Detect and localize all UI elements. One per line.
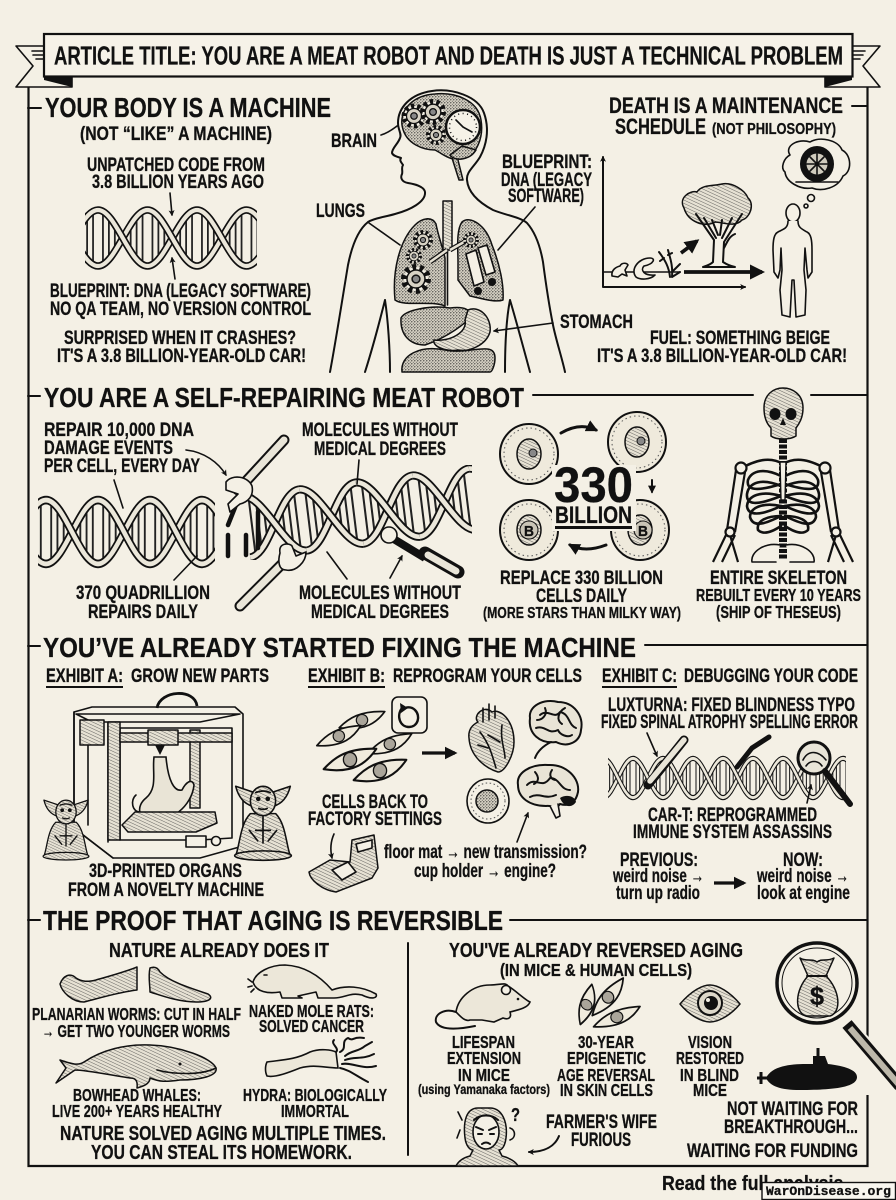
icon: round cell (467, 779, 509, 823)
text: bowhead: LIVE 200+ YEARS HEALTHY (52, 1101, 222, 1121)
exhibit c heading (602, 666, 858, 688)
subheading: you've already reversed aging (449, 940, 743, 980)
3d printer (74, 693, 243, 858)
text: unpatched code: UNPATCHED CODE FROM (87, 155, 265, 176)
printer frame (74, 707, 243, 858)
icon: epigenetic cells (567, 978, 641, 1028)
footer link: Read the full analysis → (662, 1173, 866, 1195)
text: molecules bottom: MOLECULES WITHOUT (299, 583, 461, 604)
heading: already started fixing: YOU’VE ALREADY STARTED FIXING THE MACHINE (43, 632, 636, 663)
text: surprised when it crashes: SURPRISED WHEN IT CRASHES? (64, 328, 296, 349)
money bag: $ (810, 981, 825, 1011)
text: previous (612, 850, 704, 904)
exhibit a heading (46, 666, 269, 688)
organ: intestines (402, 349, 495, 372)
evolution line (603, 271, 680, 273)
text: entire skeleton (696, 568, 861, 622)
text: vision restored: IN BLIND (680, 1065, 739, 1085)
text: now (756, 850, 850, 904)
heading: your body is a machine: YOUR BODY IS A MACHINE (45, 92, 331, 123)
arrow: to floor mat (331, 834, 334, 858)
text: epigenetic age reversal: EPIGENETIC (567, 1048, 646, 1068)
exhibit c heading: EXHIBIT C: (602, 666, 677, 687)
icon: lizard (634, 258, 655, 279)
text: surprised when it crashes: IT'S A 3.8 BILLION-YEAR-OLD CAR! (57, 346, 306, 367)
text: farmer's wife furious: FURIOUS (571, 1130, 631, 1151)
text: hydra (243, 1085, 387, 1121)
text: 370 quadrillion: 370 QUADRILLION (76, 583, 210, 604)
text: cells back to factory settings: FACTORY SETTINGS (308, 809, 442, 830)
icon: brain bottom (518, 765, 578, 818)
arrow: to brain (517, 813, 528, 842)
organ: stomach (434, 309, 490, 350)
text: mole rats (249, 1001, 374, 1036)
text: planarian (32, 1004, 241, 1041)
arrow: to dna from below (172, 258, 175, 279)
pelvis (752, 544, 814, 562)
icon: brain top (530, 701, 582, 758)
icon: frog (612, 263, 628, 277)
text: 3d printed organs: FROM A NOVELTY MACHINE (68, 880, 264, 901)
text: repair 10,000 (44, 420, 200, 477)
text: entire skeleton: (SHIP OF THESEUS) (716, 602, 841, 622)
text: cells back to factory settings (308, 792, 442, 830)
icon: planarian worm right half (149, 967, 211, 1002)
text: unpatched code: 3.8 BILLION YEARS AGO (92, 172, 264, 193)
icon: bowhead whale (56, 1045, 216, 1088)
text: vision restored: RESTORED (676, 1048, 744, 1068)
icon: submarine (757, 1048, 857, 1090)
cell bottom right: B (638, 523, 648, 540)
helix (573, 758, 873, 798)
text: previous: weird noise → (612, 866, 704, 887)
pencil (648, 740, 684, 785)
arrow: previous to now (714, 881, 744, 885)
text: previous: PREVIOUS: (620, 850, 698, 871)
text: repair 10,000: DAMAGE EVENTS (44, 438, 173, 459)
yoda left (43, 800, 89, 860)
text: molecules top: MOLECULES WITHOUT (302, 420, 458, 441)
text: 3d printed organs: 3D-PRINTED ORGANS (89, 861, 242, 882)
dna with tools (608, 734, 853, 807)
cell top left (500, 424, 558, 484)
labels (316, 131, 633, 333)
text: repair 10,000: PER CELL, EVERY DAY (44, 456, 200, 477)
text: nature solved aging (60, 1123, 386, 1164)
icon: farmer's wife (456, 1105, 520, 1166)
exhibit a heading: GROW NEW PARTS (131, 666, 269, 687)
printed stomach (140, 757, 194, 821)
text: bowhead (52, 1085, 222, 1121)
text: nature solved aging: YOU CAN STEAL ITS HOMEWORK. (91, 1142, 352, 1164)
broken dna pieces (228, 505, 258, 556)
arrow: to pencil (647, 733, 657, 756)
scalpel (737, 737, 769, 767)
text: lifespan extension: (using Yamanaka factors) (418, 1081, 550, 1097)
text: vision restored: VISION (688, 1032, 732, 1052)
text: hydra: IMMORTAL (281, 1101, 349, 1121)
arrows to dna (114, 450, 402, 580)
magnifier handle (847, 1024, 896, 1086)
subheading: you've already reversed aging: (IN MICE & HUMAN CELLS) (500, 960, 692, 980)
text: car-t: CAR-T: REPROGRAMMED (648, 805, 817, 826)
icon: dna helix (85, 206, 257, 270)
text: epigenetic age reversal: IN SKIN CELLS (560, 1080, 653, 1100)
wrench bottom (240, 544, 306, 606)
magnifier with money bag (777, 943, 896, 1086)
skull (764, 388, 803, 439)
icon: heart (469, 704, 514, 772)
arrows between cells (561, 427, 652, 549)
text: epigenetic age reversal (557, 1032, 655, 1100)
text: floor mat (384, 842, 587, 882)
section: proof that aging is reversible (28, 905, 896, 1166)
text: vision restored: MICE (693, 1080, 727, 1100)
exhibit a heading: EXHIBIT A: (46, 666, 123, 687)
text: floor mat: floor mat → new transmission? (384, 842, 587, 863)
text: floor mat: cup holder → engine? (414, 861, 556, 882)
text: fuel (597, 328, 847, 367)
arrow: thick diagonal (681, 241, 697, 253)
icon: sprout (659, 250, 680, 277)
text: blueprint dna: BLUEPRINT: DNA (LEGACY SOFTWARE) (50, 281, 311, 302)
section: death is a maintenance schedule (597, 93, 867, 367)
text: now: look at engine (757, 883, 850, 904)
heading: self-repairing meat robot: YOU ARE A SELF-REPAIRING MEAT ROBOT (44, 382, 524, 413)
dna helix right fragment (248, 465, 472, 560)
heading: death is a maintenance schedule: DEATH IS A MAINTENANCE (609, 93, 843, 118)
text: hydra: HYDRA: BIOLOGICALLY (243, 1085, 387, 1105)
heading: your body is a machine (28, 92, 331, 145)
filament tube (157, 693, 197, 708)
text: now: weird noise → (756, 866, 849, 887)
text: molecules top (302, 420, 458, 460)
text: lifespan extension: LIFESPAN (452, 1032, 515, 1052)
text: replace 330 billion: (MORE STARS THAN MILKY WAY) (483, 605, 681, 622)
text: nature solved aging: NATURE SOLVED AGING MULTIPLE TIMES. (60, 1123, 386, 1145)
wrench top (226, 440, 284, 512)
arrow: to magnifier (807, 785, 811, 803)
organ: trachea (443, 201, 452, 305)
text: planarian: → GET TWO YOUNGER WORMS (42, 1021, 230, 1041)
arrow: thick horizontal (684, 270, 762, 274)
heading: death is a maintenance schedule: SCHEDULE (615, 114, 706, 139)
subheading: you've already reversed aging: YOU'VE ALREADY REVERSED AGING (449, 940, 743, 962)
arrows to organs (369, 126, 553, 331)
title banner (16, 34, 880, 87)
text: replace 330 billion: REPLACE 330 BILLION (500, 568, 663, 589)
skeleton (713, 388, 853, 562)
text: mole rats: NAKED MOLE RATS: (249, 1001, 374, 1021)
number: 330 billion: 330 (554, 457, 633, 513)
text: 3d printed organs (68, 861, 264, 901)
text: not waiting: NOT WAITING FOR (727, 1099, 858, 1120)
organ: brain with gears and clock (402, 94, 482, 180)
arrow: to dna from above (170, 193, 172, 215)
text: car-t (633, 805, 832, 843)
spine (779, 439, 787, 560)
icon: eye (680, 985, 740, 1022)
yoda right (235, 786, 291, 860)
control panel (186, 836, 206, 847)
text: cells back to factory settings: CELLS BACK TO (322, 792, 428, 813)
text: now: NOW: (783, 850, 823, 871)
icon: reset button (392, 697, 427, 733)
divider (407, 943, 409, 1155)
chart axes (603, 157, 745, 287)
text: farmer's wife furious (546, 1112, 657, 1151)
text: bowhead: BOWHEAD WHALES: (73, 1085, 201, 1105)
text: molecules bottom (299, 583, 461, 623)
text: mole rats: SOLVED CANCER (259, 1016, 364, 1036)
labels: STOMACH (560, 312, 633, 333)
text: previous: turn up radio (616, 883, 700, 904)
text: 370 quadrillion: REPAIRS DAILY (88, 602, 198, 623)
text: unpatched code (87, 155, 265, 193)
exhibit b heading (308, 666, 582, 688)
exhibit b heading: EXHIBIT B: (308, 666, 385, 687)
text: molecules bottom: MEDICAL DEGREES (311, 602, 449, 623)
text: entire skeleton: ENTIRE SKELETON (710, 568, 847, 589)
labels: BLUEPRINT: (502, 152, 592, 173)
text: not waiting (687, 1099, 858, 1162)
cell top right (608, 412, 666, 472)
text: blueprint dna (50, 281, 311, 320)
text: lifespan extension (418, 1032, 550, 1097)
labels: LUNGS (316, 201, 365, 222)
icon: hydra (266, 1038, 376, 1082)
cell bottom left: B (524, 523, 534, 540)
labels: SOFTWARE) (508, 186, 584, 207)
text: lifespan extension: IN MICE (458, 1065, 510, 1085)
text: farmer's wife furious: FARMER'S WIFE (546, 1112, 657, 1133)
text: replace 330 billion (483, 568, 681, 622)
text: epigenetic age reversal: 30-YEAR (578, 1032, 634, 1052)
text: planarian: PLANARIAN WORMS: CUT IN HALF (32, 1004, 241, 1024)
icon: naked mole rat (248, 965, 376, 998)
text: epigenetic age reversal: AGE REVERSAL (557, 1065, 655, 1085)
organ: liver (401, 307, 470, 345)
magnifier (798, 742, 850, 804)
source badge: WarOnDisease.org (766, 1184, 891, 1199)
labels: DNA (LEGACY (501, 170, 592, 191)
icon: farmer's wife: ? (511, 1105, 520, 1125)
text: surprised when it crashes (57, 328, 306, 367)
icon: tree (682, 184, 751, 267)
text: lifespan extension: EXTENSION (447, 1048, 521, 1068)
icon: planarian worm left half (60, 967, 137, 1002)
ribcage (738, 460, 828, 533)
body anatomy illustration (316, 90, 633, 372)
body outline (330, 90, 565, 372)
text: 370 quadrillion (76, 583, 210, 623)
exhibit b heading: REPROGRAM YOUR CELLS (393, 666, 582, 687)
icon: human silhouette (773, 204, 812, 317)
icon: mouse (436, 984, 530, 1029)
section: your body is a machine (28, 92, 331, 367)
dna helix left fragment (38, 496, 215, 568)
build plate (122, 812, 217, 832)
wrench/screwdriver right (381, 527, 458, 572)
money bag (798, 958, 838, 1016)
organ: right lung with pistons (450, 220, 503, 301)
arrow: cells to organs (422, 751, 455, 755)
heading: proof aging reversible: THE PROOF THAT AGING IS REVERSIBLE (43, 905, 503, 936)
cell bottom right (611, 500, 669, 560)
text: vision restored (676, 1032, 744, 1100)
text: repair 10,000: REPAIR 10,000 DNA (44, 420, 194, 441)
subheading: nature already does it: NATURE ALREADY DOES IT (109, 940, 329, 962)
heading: death is a maintenance schedule (609, 93, 867, 139)
text: blueprint dna: NO QA TEAM, NO VERSION CONTROL (50, 299, 311, 320)
thought bubble with flat tire (783, 139, 850, 208)
sternum (780, 462, 786, 500)
text: molecules top: MEDICAL DEGREES (314, 439, 446, 460)
text: luxturna (601, 695, 858, 733)
section: already started fixing the machine (28, 632, 873, 904)
heading: death is a maintenance schedule: (NOT PHILOSOPHY) (712, 121, 836, 138)
organ: left lung with gears (394, 219, 447, 306)
labels: BRAIN (331, 131, 377, 152)
cells group (315, 711, 413, 781)
text: replace 330 billion: CELLS DAILY (536, 586, 627, 607)
arms (713, 462, 853, 562)
magnifier lens (777, 943, 857, 1023)
icon: car seat floor mat (309, 835, 378, 892)
cell bottom left (500, 500, 558, 560)
cell cycle diagram (500, 412, 669, 560)
heading: your body is a machine: (NOT “LIKE” A MACHINE) (80, 124, 272, 145)
number: 330 billion: BILLION (555, 502, 632, 529)
section: self-repairing meat robot (0, 382, 867, 623)
arrow: to farmer's wife (529, 1136, 559, 1152)
text: fuel: FUEL: SOMETHING BEIGE (650, 328, 830, 349)
